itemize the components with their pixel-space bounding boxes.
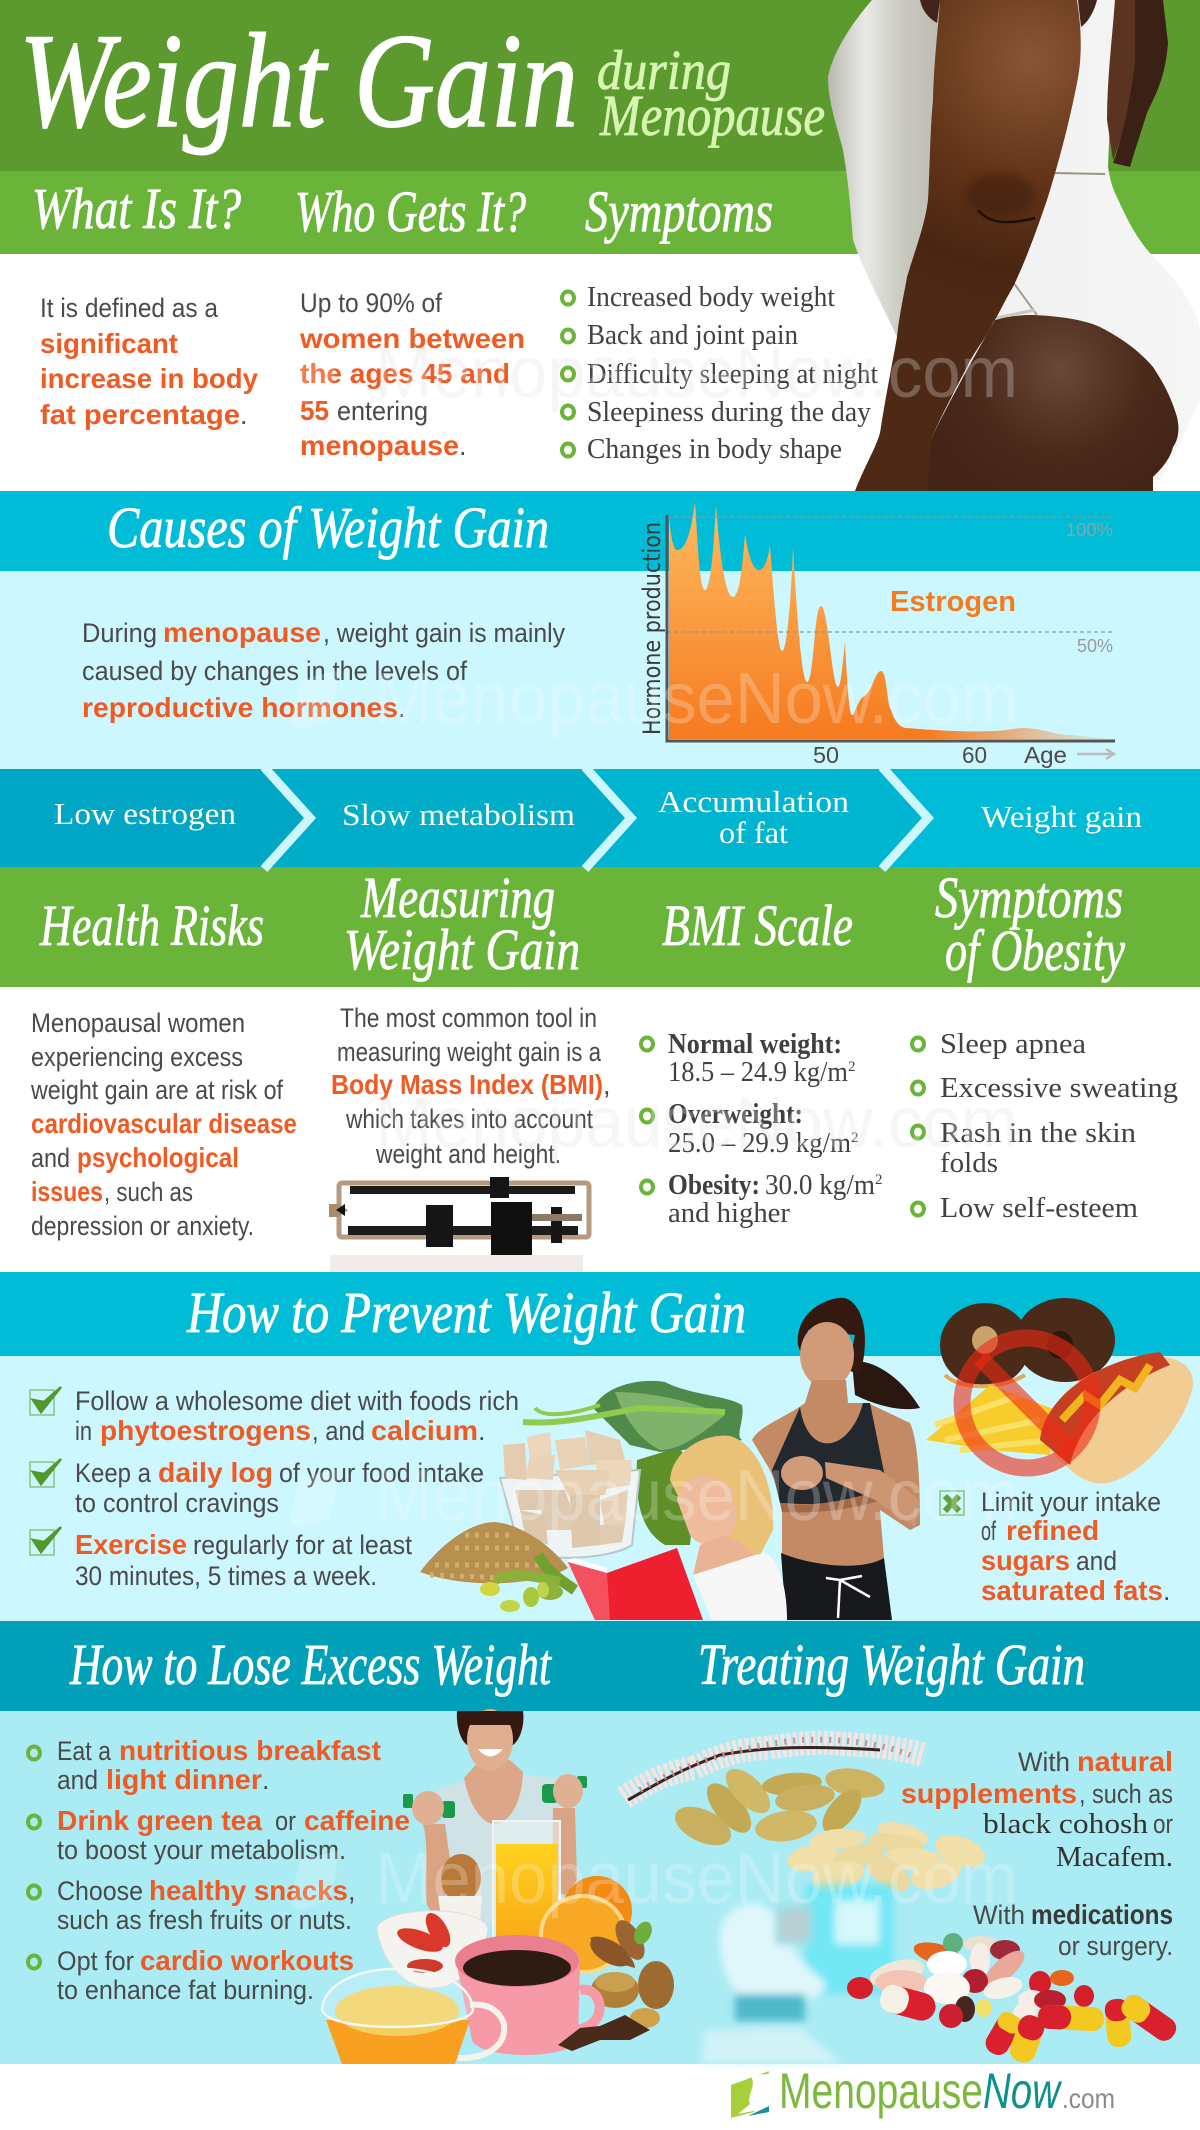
- list: BMI scale: Obesity:: [668, 1170, 760, 1201]
- logo: MenopauseNow.com: .com: [1062, 2083, 1115, 2114]
- section headings: what, who, symptoms: Who Gets It?: [295, 179, 526, 244]
- list: lose excess weight: healthy snacks: [149, 1875, 348, 1906]
- title: Weight Gain: [19, 7, 578, 156]
- list: prevention checklist: in: [75, 1416, 92, 1446]
- text: measuring weight gain: Body Mass Index (BMI): [331, 1069, 603, 1100]
- text: who gets it: 55: [300, 395, 329, 426]
- list: lose excess weight: Eat a: [57, 1736, 112, 1766]
- text: treating weight gain: or surgery.: [1058, 1931, 1173, 1961]
- callout: limit your intake: sugars: [981, 1545, 1070, 1576]
- watermark: MenopauseNow.com: [375, 1083, 1018, 1163]
- text: what is it: increase in body: [40, 363, 258, 394]
- list: lose excess weight: light dinner: [106, 1764, 262, 1795]
- text: causes: [82, 617, 565, 723]
- watermark: MenopauseNow.com: [375, 1083, 1018, 1163]
- text: measuring weight gain: ,: [603, 1070, 611, 1100]
- process chevrons: Weight gain: [981, 799, 1143, 834]
- text: what is it: It is defined as a: [40, 293, 219, 323]
- list: BMI scale: 30.0 kg/m: [765, 1170, 875, 1201]
- text: what is it: .: [240, 400, 248, 430]
- headings: risks, measuring, BMI, obesity: Health Risks: [39, 893, 264, 958]
- image: pile of pills and capsules: [847, 1933, 1180, 2066]
- text: treating weight gain: Macafem.: [1056, 1842, 1173, 1873]
- text: treating weight gain: [901, 1746, 1173, 1961]
- list: prevention checklist: Follow a wholesome diet with foods rich: [75, 1386, 519, 1416]
- chart: estrogen production by age: 50: [813, 742, 839, 768]
- text: health risks: issues: [31, 1176, 103, 1207]
- process chevrons: [0, 767, 1200, 869]
- list: symptoms: Increased body weight: [587, 282, 835, 313]
- image: woman reading a red book: [568, 1436, 787, 1620]
- list: symptoms of obesity: Excessive sweating: [940, 1073, 1178, 1104]
- list: prevention checklist: [30, 1386, 519, 1591]
- chart: estrogen production by age: Estrogen: [890, 586, 1016, 618]
- list: BMI scale: and higher: [668, 1198, 791, 1229]
- title: Menopause: [599, 83, 825, 148]
- callout: limit your intake: refined: [1006, 1515, 1099, 1546]
- text: health risks: , such as: [104, 1177, 193, 1207]
- text: what is it: significant: [40, 328, 178, 359]
- headings: risks, measuring, BMI, obesity: BMI Scale: [662, 893, 853, 958]
- text: causes: .: [398, 693, 406, 723]
- text: causes: menopause: [163, 617, 321, 648]
- image: woman with dumbbells: [403, 1709, 587, 1925]
- text: treating weight gain: or: [1153, 1809, 1173, 1839]
- list: lose excess weight: [28, 1735, 410, 2005]
- text: causes: caused by changes in the levels of: [82, 656, 467, 686]
- text: who gets it: menopause: [300, 430, 459, 461]
- image: crossed-out fast food: [926, 1298, 1193, 1484]
- logo: MenopauseNow.com: [731, 2063, 1115, 2119]
- image: breakfast foods: [322, 1821, 674, 2064]
- list: prevention checklist: Keep a: [75, 1458, 152, 1488]
- list: symptoms of obesity: [912, 1029, 1178, 1224]
- list: lose excess weight: and: [57, 1765, 98, 1795]
- text: who gets it: Up to 90% of: [300, 288, 442, 318]
- logo: MenopauseNow.com: Now: [983, 2063, 1062, 2119]
- process chevrons: Accumulation: [658, 784, 850, 819]
- list: lose excess weight: Drink green tea: [57, 1805, 262, 1836]
- chart: estrogen production by age: [638, 502, 1115, 768]
- process chevrons: Low estrogen: [54, 796, 237, 831]
- list: prevention checklist: 30 minutes, 5 times a week.: [75, 1561, 377, 1591]
- text: health risks: depression or anxiety.: [31, 1211, 254, 1241]
- headings: lose excess weight, treating: How to Lose Excess Weight: [69, 1632, 552, 1697]
- list: symptoms of obesity: folds: [940, 1148, 998, 1179]
- list: symptoms of obesity: Rash in the skin: [940, 1118, 1136, 1149]
- image: cream softgel tablets: [785, 1818, 989, 1898]
- list: lose excess weight: cardio workouts: [140, 1945, 354, 1976]
- list: symptoms: Difficulty sleeping at night: [587, 359, 878, 390]
- callout: limit your intake: and: [1076, 1546, 1117, 1576]
- list: prevention checklist: , and: [312, 1416, 365, 1446]
- list: lose excess weight: caffeine: [304, 1805, 410, 1836]
- list: BMI scale: Overweight:: [668, 1099, 803, 1130]
- headings: risks, measuring, BMI, obesity: Weight Gain: [344, 917, 580, 982]
- list: prevention checklist: Exercise: [75, 1529, 187, 1560]
- watermark: MenopauseNow.com: [375, 1839, 1018, 1919]
- headings: risks, measuring, BMI, obesity: of Obesity: [945, 918, 1125, 983]
- text: measuring weight gain: The most common tool in: [340, 1003, 597, 1033]
- list: symptoms: Back and joint pain: [587, 320, 798, 351]
- text: who gets it: entering: [337, 396, 428, 426]
- list: BMI scale: 2: [851, 1130, 858, 1146]
- text: health risks: and: [31, 1143, 70, 1173]
- image: leafy greens and broccoli: [523, 1381, 743, 1545]
- logo: MenopauseNow.com: Menopause: [779, 2063, 983, 2119]
- text: health risks: [30, 1008, 297, 1241]
- callout: limit your intake: saturated fats: [981, 1575, 1163, 1606]
- heading: how to prevent weight gain: How to Prevent Weight Gain: [186, 1280, 746, 1345]
- chart: estrogen production by age: 50%: [1077, 636, 1113, 656]
- section headings: what, who, symptoms: What Is It?: [32, 176, 241, 241]
- text: treating weight gain: medications: [1031, 1899, 1173, 1930]
- text: health risks: experiencing excess: [31, 1042, 243, 1072]
- list: lose excess weight: .: [262, 1765, 270, 1795]
- image: runner woman: [752, 1298, 920, 1620]
- callout: limit your intake: [940, 1487, 1171, 1606]
- text: causes: During: [82, 618, 157, 648]
- heading: causes of weight gain: Causes of Weight Gain: [107, 495, 549, 560]
- list: BMI scale: 18.5 – 24.9 kg/m: [668, 1057, 848, 1088]
- list: symptoms: [562, 282, 878, 465]
- text: treating weight gain: black cohosh: [983, 1809, 1148, 1840]
- text: health risks: weight gain are at risk of: [30, 1075, 283, 1105]
- list: BMI scale: 25.0 – 29.9 kg/m: [668, 1128, 851, 1159]
- list: BMI scale: 2: [875, 1172, 882, 1188]
- image: herbal tablets: [669, 1761, 887, 1853]
- image: tofu in glass: [500, 1430, 640, 1558]
- list: prevention checklist: .: [478, 1416, 486, 1446]
- icon: balance beam scale: [329, 1177, 589, 1272]
- headings: lose excess weight, treating: Treating Weight Gain: [698, 1632, 1085, 1697]
- list: lose excess weight: or: [275, 1806, 296, 1836]
- chart: estrogen production by age: Hormone production: [638, 522, 666, 735]
- image: blurred doctor: [701, 1884, 894, 2064]
- text: who gets it: [299, 288, 525, 461]
- list: lose excess weight: to enhance fat burning.: [57, 1975, 314, 2005]
- chart: estrogen production by age: 100%: [1066, 520, 1113, 540]
- list: prevention checklist: regularly for at least: [193, 1530, 412, 1560]
- list: BMI scale: 2: [848, 1059, 856, 1075]
- image: black cohosh flower branch: [624, 1740, 925, 1800]
- text: treating weight gain: With: [1018, 1747, 1070, 1777]
- text: health risks: cardiovascular disease: [31, 1108, 297, 1139]
- text: who gets it: .: [459, 431, 467, 461]
- section headings: what, who, symptoms: Symptoms: [585, 179, 773, 244]
- list: prevention checklist: of your food intake: [279, 1458, 484, 1488]
- list: prevention checklist: to control cravings: [75, 1488, 279, 1518]
- list: lose excess weight: ,: [348, 1876, 356, 1906]
- text: who gets it: women between: [299, 323, 525, 354]
- text: what is it: fat percentage: [40, 399, 240, 430]
- list: symptoms: Changes in body shape: [587, 434, 842, 465]
- headings: risks, measuring, BMI, obesity: [39, 865, 1125, 983]
- text: causes: reproductive hormones: [82, 692, 398, 723]
- text: treating weight gain: , such as: [1079, 1779, 1173, 1809]
- list: prevention checklist: calcium: [371, 1415, 478, 1446]
- watermark: [290, 333, 1018, 1919]
- callout: limit your intake: Limit your intake: [981, 1487, 1161, 1517]
- watermark: MenopauseNow.com: [375, 333, 1018, 413]
- headings: lose excess weight, treating: [69, 1632, 1085, 1697]
- text: treating weight gain: With: [973, 1900, 1025, 1930]
- text: treating weight gain: supplements: [901, 1778, 1077, 1809]
- image: soybeans and edamame: [420, 1522, 575, 1612]
- process chevrons: Slow metabolism: [342, 797, 575, 832]
- list: prevention checklist: daily log: [158, 1457, 273, 1488]
- text: treating weight gain: natural: [1077, 1746, 1173, 1777]
- text: measuring weight gain: weight and height.: [375, 1139, 561, 1169]
- text: measuring weight gain: [331, 1003, 611, 1169]
- callout: limit your intake: .: [1163, 1576, 1171, 1606]
- text: causes: , weight gain is mainly: [323, 618, 565, 648]
- text: measuring weight gain: which takes into account: [345, 1104, 593, 1134]
- title: during: [597, 40, 731, 102]
- watermark: MenopauseNow.com: [375, 1456, 1018, 1536]
- process chevrons: of fat: [719, 815, 788, 850]
- headings: risks, measuring, BMI, obesity: Symptoms: [935, 865, 1123, 930]
- list: BMI scale: Normal weight:: [668, 1029, 842, 1060]
- list: lose excess weight: Choose: [57, 1876, 143, 1906]
- headings: risks, measuring, BMI, obesity: Measuring: [360, 865, 555, 930]
- photo: woman in white swimsuit: [828, 0, 1200, 491]
- list: symptoms of obesity: Sleep apnea: [940, 1029, 1087, 1060]
- list: symptoms of obesity: Low self-esteem: [940, 1193, 1138, 1224]
- chart: estrogen production by age: 60: [962, 742, 987, 768]
- list: lose excess weight: Opt for: [57, 1946, 134, 1976]
- text: health risks: psychological: [77, 1142, 239, 1173]
- list: symptoms: Sleepiness during the day: [587, 397, 871, 428]
- text: who gets it: the ages 45 and: [300, 358, 510, 389]
- list: lose excess weight: nutritious breakfast: [119, 1735, 381, 1766]
- list: BMI scale: [641, 1029, 882, 1229]
- list: prevention checklist: phytoestrogens: [100, 1415, 311, 1446]
- watermark: MenopauseNow.com: [375, 659, 1018, 739]
- list: lose excess weight: to boost your metabolism.: [57, 1835, 346, 1865]
- section headings: what, who, symptoms: [32, 176, 773, 244]
- chart: estrogen production by age: Age: [1024, 742, 1067, 768]
- text: what is it: [40, 293, 258, 430]
- callout: limit your intake: of: [981, 1516, 996, 1546]
- list: lose excess weight: such as fresh fruits or nuts.: [57, 1905, 352, 1935]
- watermark: MenopauseNow.com: [375, 333, 1018, 413]
- text: health risks: Menopausal women: [31, 1008, 245, 1038]
- text: measuring weight gain: measuring weight gain is a: [337, 1037, 602, 1067]
